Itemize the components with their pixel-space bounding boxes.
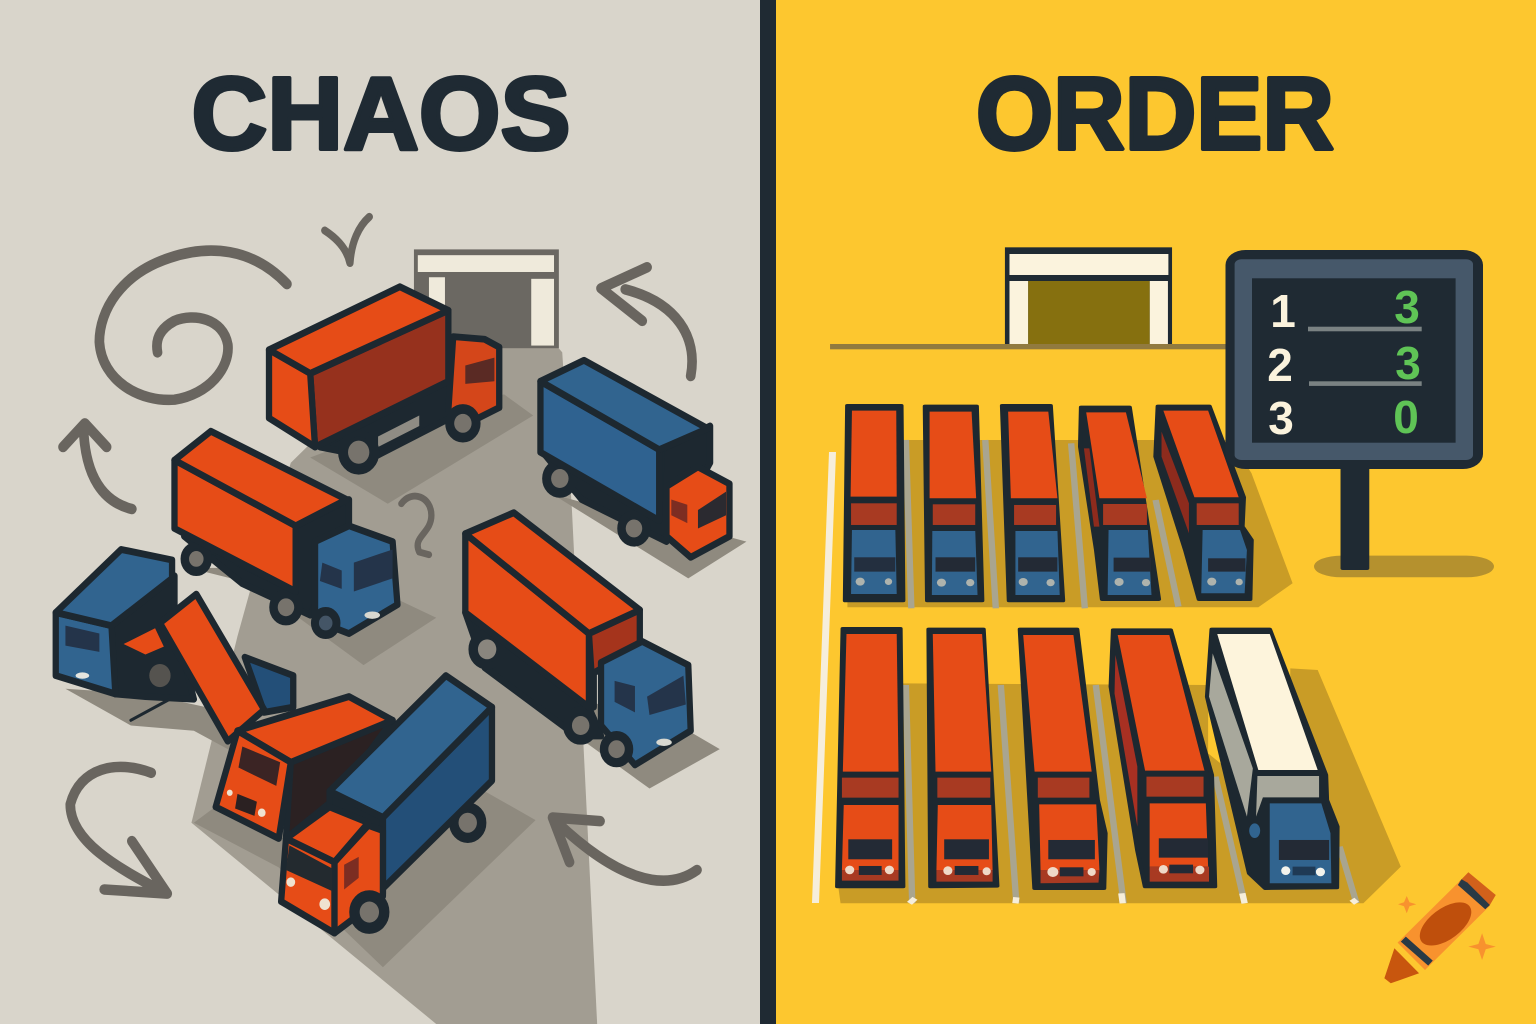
- warehouse gate: [1005, 247, 1172, 345]
- warehouse gate, ground line and signboard post: [830, 247, 1494, 577]
- arrow: spiral: [99, 251, 287, 400]
- truck j: white box: [1207, 629, 1337, 888]
- row 3: [1268, 391, 1419, 444]
- signboard post: [1341, 467, 1369, 570]
- scoreboard: [1226, 250, 1483, 469]
- truck: orange box, top: [269, 287, 499, 471]
- arrow: bottom right: [553, 817, 697, 881]
- panel: chaos yard: [56, 217, 746, 1024]
- truck c: [1002, 406, 1063, 601]
- truck h: [1020, 629, 1105, 888]
- post shadow: [1314, 556, 1494, 577]
- row 2: 3: [1395, 337, 1421, 389]
- truck: crashed blue, left: [56, 549, 293, 741]
- row 1: 3: [1394, 281, 1420, 333]
- truck: orange box, blue cab, middle left: [174, 431, 397, 636]
- truck d: [1080, 407, 1159, 599]
- center divider: [760, 0, 776, 1024]
- truck: blue box, orange cab, front: [281, 676, 492, 933]
- truck g: [929, 629, 997, 887]
- row 1: 1: [1270, 285, 1296, 337]
- truck shadows: [65, 394, 746, 967]
- title: chaos: CHAOS: [192, 56, 570, 171]
- row 3: 0: [1393, 391, 1419, 443]
- bottom row shadows and lane strips: [838, 668, 1401, 903]
- question mark squiggle: [401, 496, 431, 555]
- row 2: [1267, 337, 1422, 391]
- loading gate: [414, 249, 559, 348]
- crayon icon: [1384, 872, 1496, 983]
- arrow: small v mark: [325, 217, 369, 263]
- top row shadows and lane strips: [847, 440, 1293, 608]
- top row of parked trucks: [845, 406, 1293, 608]
- truck: blue box, right: [540, 360, 729, 557]
- truck f: [837, 629, 903, 887]
- truck e: [1156, 406, 1251, 599]
- title: order: ORDER: [976, 56, 1334, 171]
- truck: orange box, blue cab, middle right: [465, 513, 691, 765]
- truck a: [845, 406, 903, 601]
- truck i: [1111, 630, 1215, 887]
- lot boundary line: [812, 452, 836, 903]
- ground line: [830, 344, 1227, 349]
- row 1: [1270, 281, 1422, 337]
- arrow: bottom left: [70, 767, 167, 894]
- row 3: 3: [1268, 392, 1294, 444]
- row 2: 2: [1267, 339, 1293, 391]
- truck b: [925, 406, 982, 601]
- bottom row of parked trucks: [837, 629, 1496, 983]
- sparkle small: [1398, 896, 1416, 913]
- panel: order yard: [812, 247, 1496, 983]
- road surface: [191, 310, 597, 1024]
- truck: crashed orange, bottom: [216, 697, 393, 838]
- arrow: left: [63, 423, 132, 509]
- arrow: top right: [601, 267, 692, 376]
- sparkle large: [1468, 933, 1496, 960]
